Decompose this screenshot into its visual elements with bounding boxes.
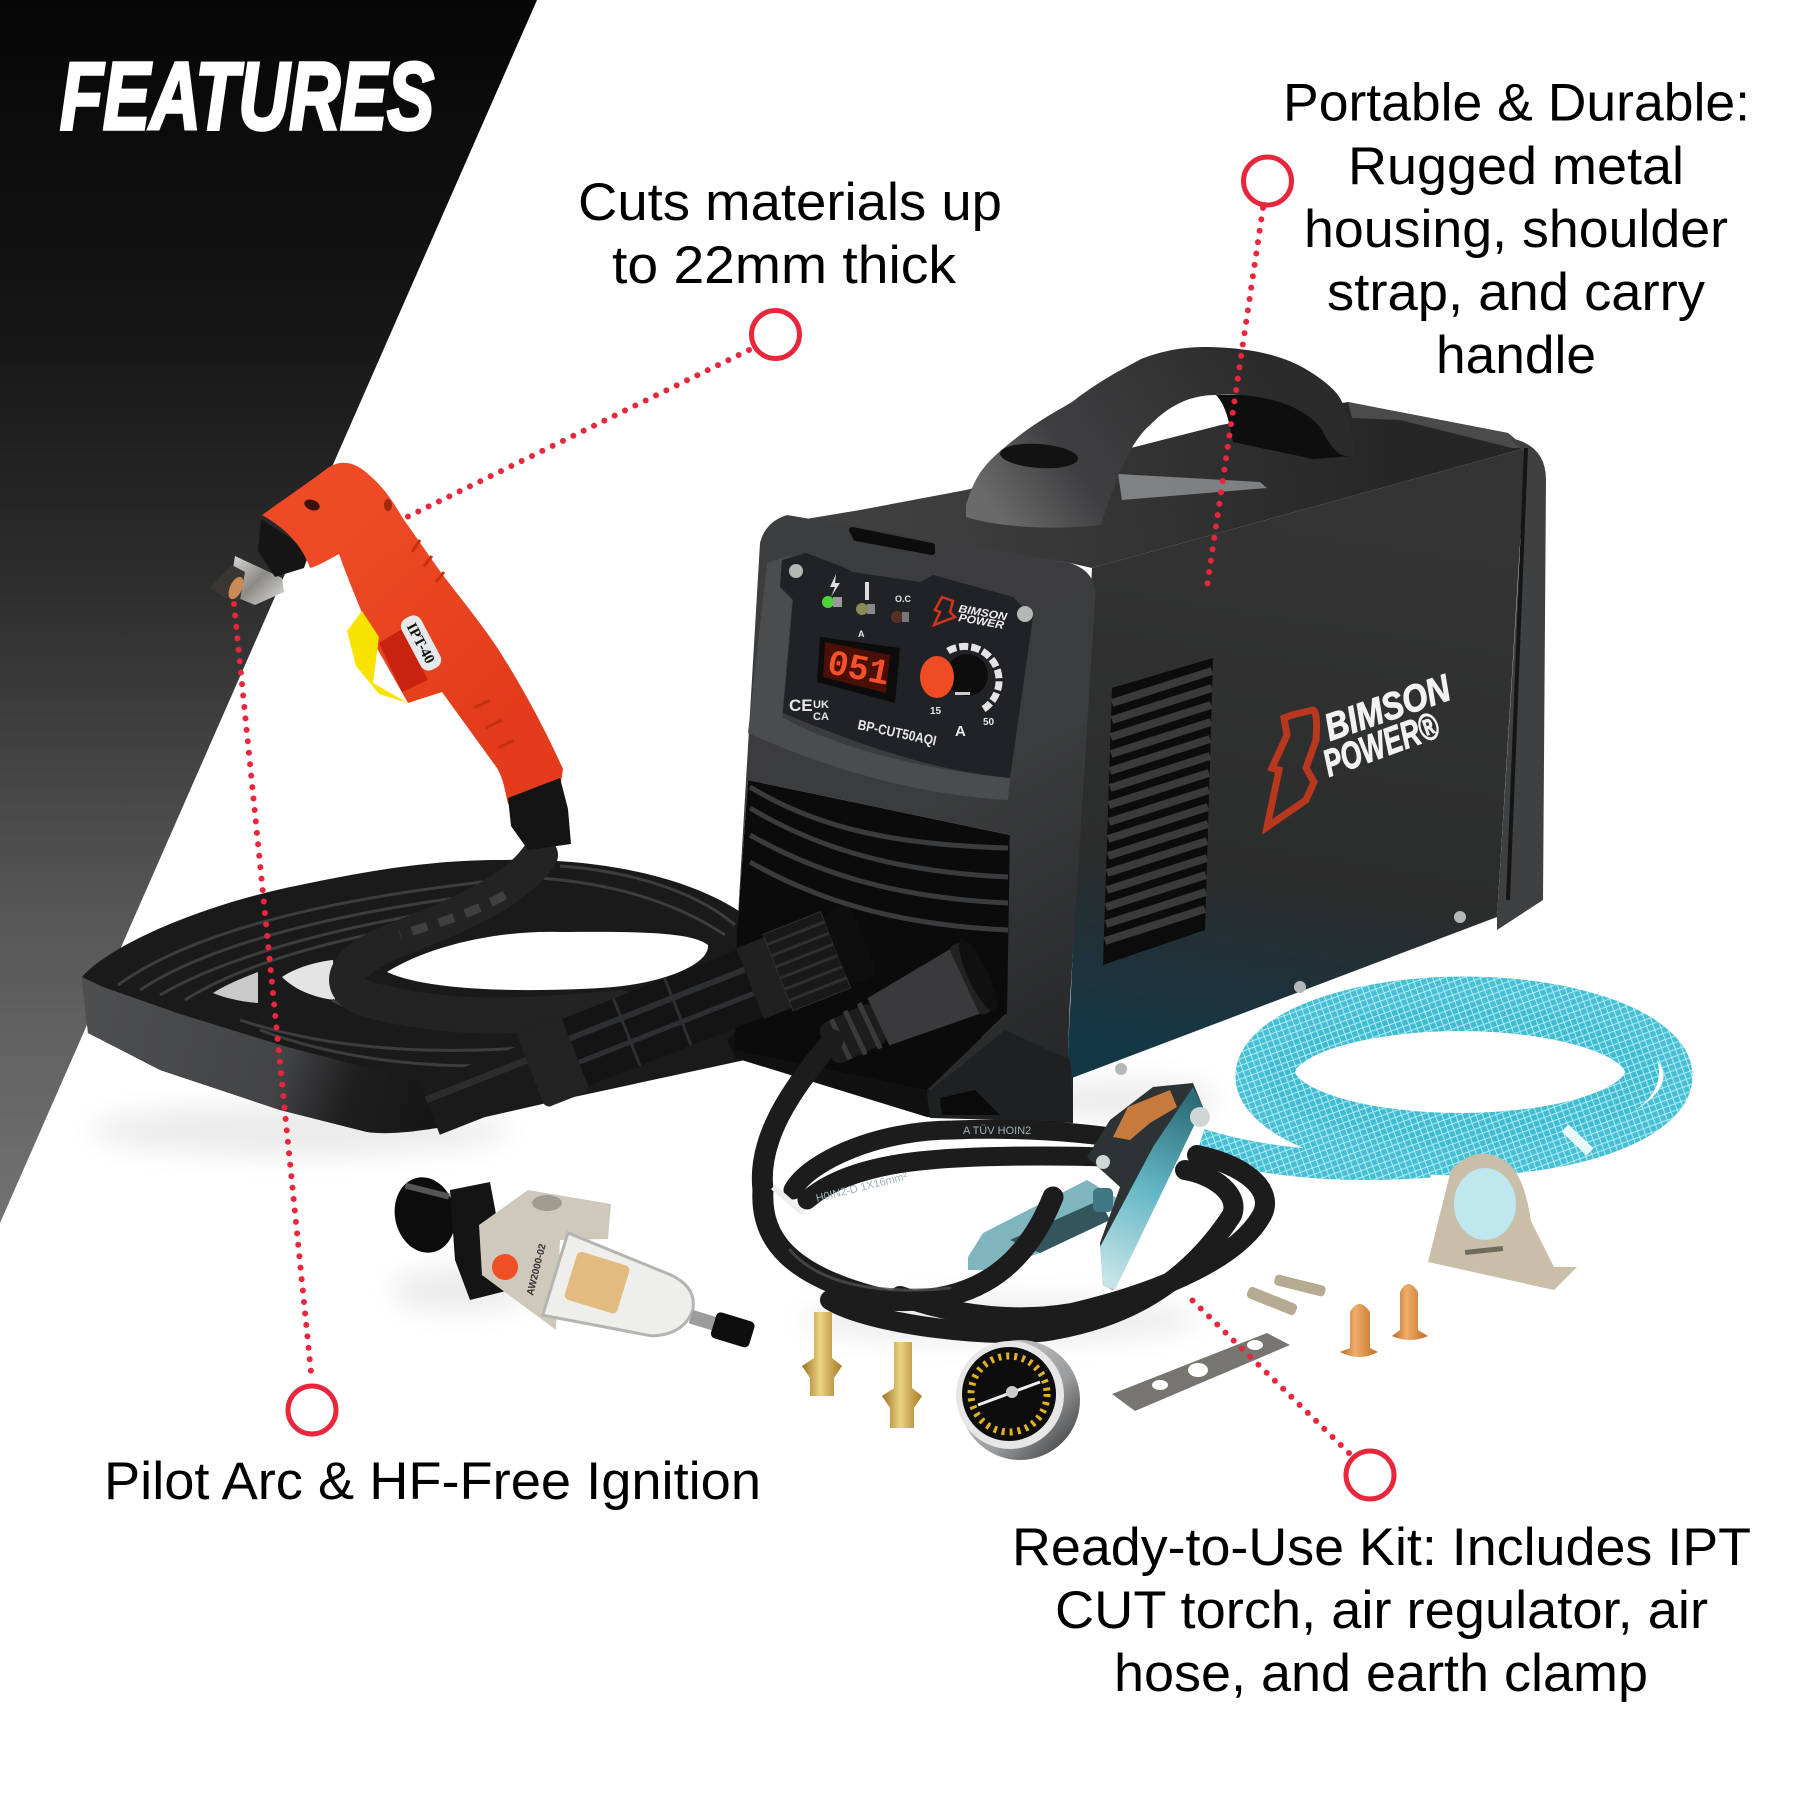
torch cable connector — [415, 901, 879, 1148]
nut — [736, 937, 792, 1019]
shiny jaw strip — [1100, 1087, 1203, 1290]
side brand logo: POWER® — [1318, 705, 1445, 785]
side brand logo — [1267, 667, 1457, 827]
mounting bracket — [1428, 1154, 1577, 1290]
ammeter label: A — [858, 629, 865, 639]
torch body — [262, 463, 563, 804]
inner hose loop — [1278, 1014, 1642, 1130]
top coil outer — [793, 1129, 1110, 1190]
earth cable connector — [809, 935, 1004, 1083]
title: FEATURES — [60, 43, 434, 150]
text: portable and durable: Portable & Durable: — [1283, 74, 1750, 132]
beige block — [479, 1190, 611, 1330]
copper jaw pad — [1113, 1090, 1177, 1140]
head vents — [303, 498, 321, 512]
bolts — [1190, 1107, 1210, 1127]
side vents — [1103, 658, 1213, 965]
front vent slats — [750, 787, 1008, 930]
amperage dial — [920, 646, 999, 710]
model label — [398, 612, 444, 674]
logo wordmark: BIMSON — [1319, 667, 1457, 750]
dial labels: A — [955, 723, 966, 740]
top coil inner — [807, 1156, 1110, 1200]
hose tail — [1200, 1143, 1430, 1166]
digital display: 051 — [824, 644, 893, 696]
yellow trigger guard — [347, 611, 408, 703]
side panel — [1068, 448, 1526, 1078]
control panel — [780, 553, 1033, 778]
text: ready to use kit: CUT torch, air regulator, air — [1055, 1581, 1708, 1640]
clamp lower blade — [968, 1180, 1120, 1270]
callout dots: kit — [1189, 1297, 1349, 1453]
grip — [562, 950, 763, 1086]
panel face — [780, 553, 1033, 778]
side screws — [1115, 911, 1466, 1075]
collar — [515, 1014, 590, 1108]
model label: IPT-40 — [403, 620, 437, 666]
floor shadows — [90, 1080, 1220, 1342]
printed label: AW2000-02 — [525, 1242, 549, 1297]
cable coil body — [82, 860, 745, 1133]
text: portable and durable: Rugged metal — [1348, 137, 1684, 196]
front housing — [737, 515, 1095, 1122]
dial labels — [930, 706, 995, 740]
panel logo: POWER — [957, 612, 1005, 632]
rear collar — [508, 778, 571, 850]
hose tie — [1565, 1128, 1590, 1152]
third loop opening — [213, 972, 258, 1003]
red button — [492, 1254, 518, 1280]
certification marks: UK — [813, 699, 829, 711]
grommet — [816, 1001, 889, 1066]
copper tip — [225, 575, 247, 601]
digital display — [817, 637, 900, 703]
callout dots: pilot arc — [234, 604, 312, 1382]
callout ring: portable — [1244, 157, 1292, 205]
panel logo: BIMSON — [957, 603, 1009, 624]
red trigger — [379, 629, 428, 692]
cable print: A TÜV HOIN2 — [963, 1125, 1031, 1137]
text: ready to use kit: Ready-to-Use Kit: Includes IPT — [1012, 1518, 1751, 1577]
plasma torch — [210, 463, 571, 850]
outer flat band — [82, 977, 443, 1132]
dial labels: 50 — [983, 717, 995, 728]
text: ready to use kit — [1012, 1518, 1751, 1703]
foot loop — [927, 1030, 1073, 1122]
outer hose loop — [1250, 991, 1678, 1161]
rear handle slot — [1348, 402, 1526, 448]
pressure gauge — [956, 1340, 1080, 1460]
chrome collar — [232, 556, 284, 605]
cable strands — [118, 866, 735, 1066]
text: portable and durable — [1283, 74, 1750, 385]
socket ring — [821, 903, 878, 986]
red logo mark — [1267, 710, 1317, 827]
callout ring: kit — [1346, 1451, 1394, 1499]
panel screws — [789, 564, 803, 578]
cable tie — [773, 1187, 803, 1213]
copper tips — [1340, 1284, 1428, 1357]
plasma cutter machine — [727, 347, 1546, 1123]
cable print — [815, 1125, 1031, 1205]
text: pilot arc: Pilot Arc & HF-Free Ignition — [104, 1452, 761, 1511]
base and feet — [727, 1010, 1073, 1123]
certification marks — [789, 696, 829, 723]
status LEDs — [822, 596, 909, 623]
text: portable and durable: handle — [1436, 326, 1596, 385]
text: cutting thickness: Cuts materials up — [578, 173, 1002, 232]
callout ring: thickness — [752, 310, 800, 358]
earth clamp upper jaw — [1087, 1083, 1210, 1290]
cable sheen — [790, 1250, 950, 1290]
bowl and nozzle — [543, 1233, 765, 1375]
panel logo — [934, 597, 1009, 632]
dark jaw body — [1087, 1083, 1203, 1290]
text: ready to use kit: hose, and earth clamp — [1114, 1644, 1648, 1703]
cable print: H0IN2-D 1X16mm² — [815, 1171, 909, 1205]
brass fittings — [802, 1312, 922, 1428]
rear frame — [1497, 438, 1546, 930]
certification marks: CE — [789, 696, 813, 715]
text: portable and durable: housing, shoulder — [1304, 200, 1728, 259]
text: cutting thickness — [578, 173, 1002, 295]
recess lip — [748, 555, 1010, 800]
coiled torch cable — [82, 855, 745, 1133]
spring — [1093, 1188, 1113, 1212]
torch lead hose — [347, 855, 620, 1016]
carry handle — [966, 347, 1353, 528]
callout ring: pilot arc — [288, 1386, 336, 1434]
lower coil — [830, 1170, 1234, 1333]
black collar — [258, 519, 310, 577]
air regulator — [388, 1172, 765, 1375]
callout dots: housing — [1206, 208, 1263, 594]
second loop opening — [282, 960, 335, 1000]
top face — [800, 402, 1526, 568]
top slot — [852, 530, 932, 552]
dark shield tip — [210, 565, 245, 600]
inner loop opening — [387, 932, 708, 990]
electrodes — [1246, 1274, 1326, 1316]
sleeve — [420, 1043, 544, 1135]
blue air hose — [1200, 991, 1678, 1166]
text: cutting thickness: to 22mm thick — [612, 236, 957, 295]
model name: BP-CUT50AQI — [856, 716, 938, 749]
LED symbols: O.C — [895, 594, 912, 604]
callout dots: torch tip to material thickness — [407, 350, 749, 517]
certification marks: CA — [813, 711, 829, 723]
spanner — [1112, 1333, 1290, 1411]
black body — [450, 1182, 510, 1300]
connector body — [863, 947, 984, 1054]
LED symbols — [830, 574, 912, 604]
black gradient diagonal panel — [0, 0, 537, 1223]
grip ridges — [412, 540, 514, 748]
earth cable — [762, 1040, 1265, 1333]
regulator knob — [388, 1172, 462, 1258]
dial labels: 15 — [930, 706, 942, 717]
right coil — [900, 1155, 1265, 1317]
text: portable and durable: strap, and carry — [1327, 263, 1705, 322]
rating label — [1118, 474, 1267, 500]
lead from connector — [762, 1040, 1053, 1301]
